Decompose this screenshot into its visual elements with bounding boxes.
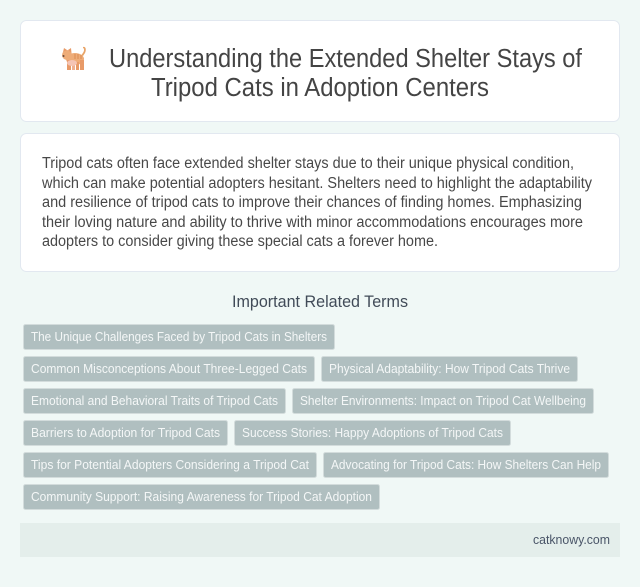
tag list (24, 324, 608, 510)
icon: orange cat (62, 47, 86, 70)
tag (24, 452, 316, 478)
tag: Common Misconceptions About Three-Legged Cats (31, 362, 307, 376)
title: Understanding the Extended Shelter Stays of (109, 45, 583, 73)
tag: Physical Adaptability: How Tripod Cats Thrive (329, 362, 570, 376)
footer (20, 523, 620, 557)
tag (24, 484, 380, 510)
text block: description: and resilience of tripod cats to improve their chances of finding homes. Emphasizing (42, 194, 582, 211)
tag: Advocating for Tripod Cats: How Shelters Can Help (331, 458, 601, 472)
text block: description (41, 155, 592, 250)
tag: Community Support: Raising Awareness for Tripod Cat Adoption (31, 490, 372, 504)
tag: Success Stories: Happy Adoptions of Tripod Cats (242, 426, 503, 440)
tag (324, 452, 608, 478)
panel: description (20, 134, 620, 272)
tag (24, 388, 286, 414)
tag (322, 356, 578, 382)
title (109, 45, 583, 102)
tag: Barriers to Adoption for Tripod Cats (31, 426, 220, 440)
footer: catknowy.com (533, 533, 610, 547)
tag (24, 420, 228, 446)
panel: title card (20, 20, 620, 122)
tag (234, 420, 510, 446)
tag: Tips for Potential Adopters Considering a Tripod Cat (31, 458, 309, 472)
heading: related terms: Important Related Terms (232, 293, 408, 311)
tag: Emotional and Behavioral Traits of Tripod Cats (31, 394, 278, 408)
tag (24, 324, 334, 350)
tag: Shelter Environments: Impact on Tripod Cat Wellbeing (300, 394, 586, 408)
tag (24, 356, 314, 382)
text block: description: Tripod cats often face extended shelter stays due to their unique physical condition, (42, 155, 574, 172)
text block: description: which can make potential adopters hesitant. Shelters need to highlight the adaptability (41, 175, 592, 192)
text block: description: their loving nature and ability to thrive with minor accommodations encourages more (42, 214, 583, 231)
tag (292, 388, 594, 414)
title: Tripod Cats in Adoption Centers (151, 74, 489, 102)
text block: description: adopters to consider giving these special cats a forever home. (42, 233, 438, 250)
tag: The Unique Challenges Faced by Tripod Cats in Shelters (31, 330, 327, 344)
